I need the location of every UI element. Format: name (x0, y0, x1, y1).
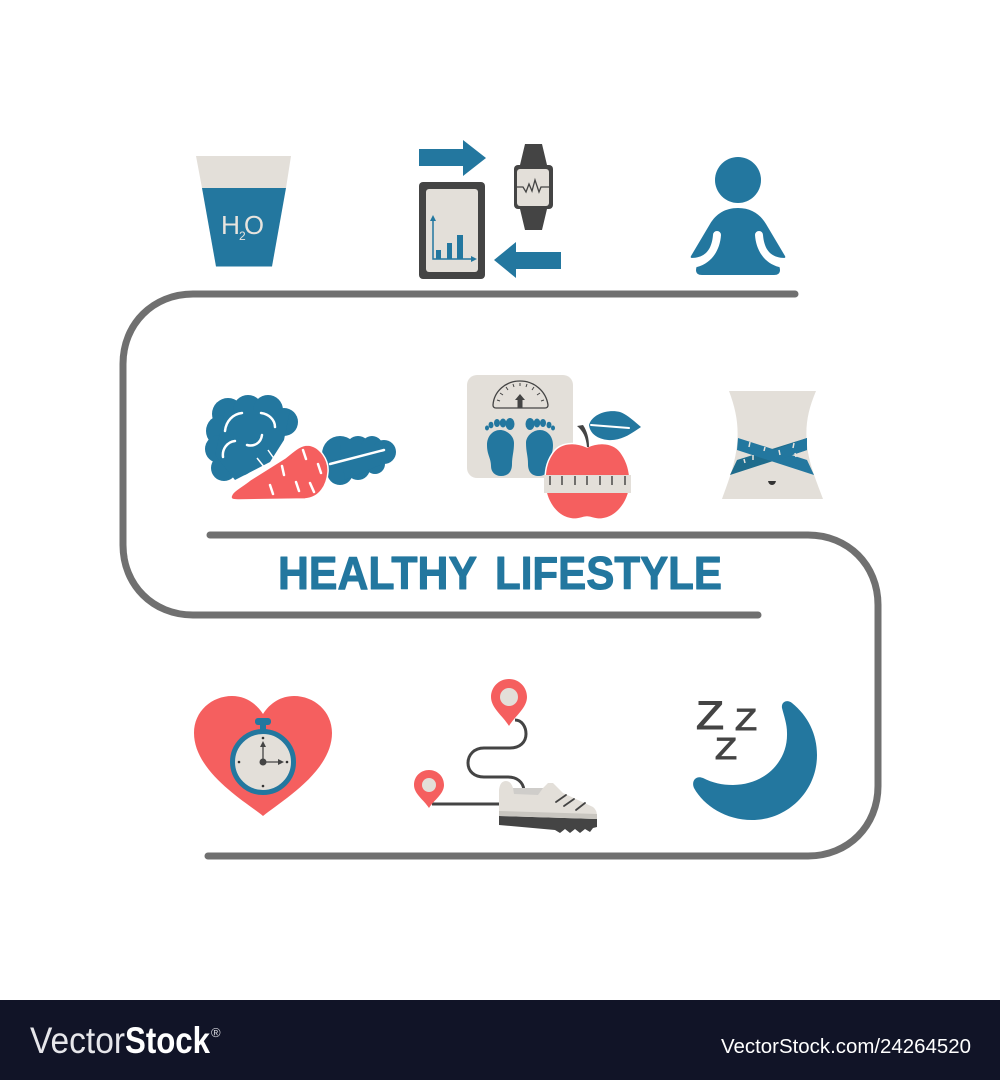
arrow: left (494, 242, 561, 278)
apple (544, 411, 641, 519)
H2O label: 2 (239, 229, 246, 243)
title: LIFESTYLE (495, 547, 722, 599)
sleep letters: Z (735, 702, 757, 737)
footer logo bold: Stock (125, 1020, 210, 1061)
icon: tablet and smartwatch sync (419, 140, 561, 279)
icon: broccoli, carrot and leaf (205, 395, 396, 500)
left pin (414, 770, 444, 808)
scale (467, 375, 573, 478)
moon (693, 701, 817, 820)
title (278, 547, 722, 599)
registered mark: ® (211, 1025, 221, 1040)
icon: waist with measuring tape (722, 391, 823, 499)
stopwatch (232, 718, 294, 792)
footer bar (0, 1000, 1000, 1080)
icon: moon and sleep letters (693, 694, 817, 820)
top pin (491, 679, 527, 726)
carrot (231, 445, 328, 500)
smartwatch (514, 144, 553, 230)
icon: weighing scale and apple (467, 375, 641, 519)
icon: glass of water (196, 156, 291, 266)
footer logo: Vector (30, 1020, 125, 1061)
H2O label (221, 210, 264, 243)
tablet (419, 182, 485, 279)
sleep letters: Z (696, 694, 724, 738)
arrow: right (419, 140, 486, 176)
leaf (322, 436, 396, 485)
sleep letters (696, 694, 757, 766)
shoe (499, 781, 597, 833)
icon: heart with stopwatch (194, 696, 332, 816)
broccoli (205, 395, 298, 481)
H2O label: H (221, 210, 240, 240)
sleep letters: Z (715, 731, 737, 766)
H2O label: O (244, 210, 264, 240)
route (432, 720, 526, 804)
icon: meditating person (686, 157, 790, 275)
icon: running route and shoe (414, 679, 597, 833)
title: HEALTHY (278, 547, 477, 599)
winding path lines (123, 294, 878, 856)
footer url: VectorStock.com/24264520 (721, 1036, 971, 1058)
